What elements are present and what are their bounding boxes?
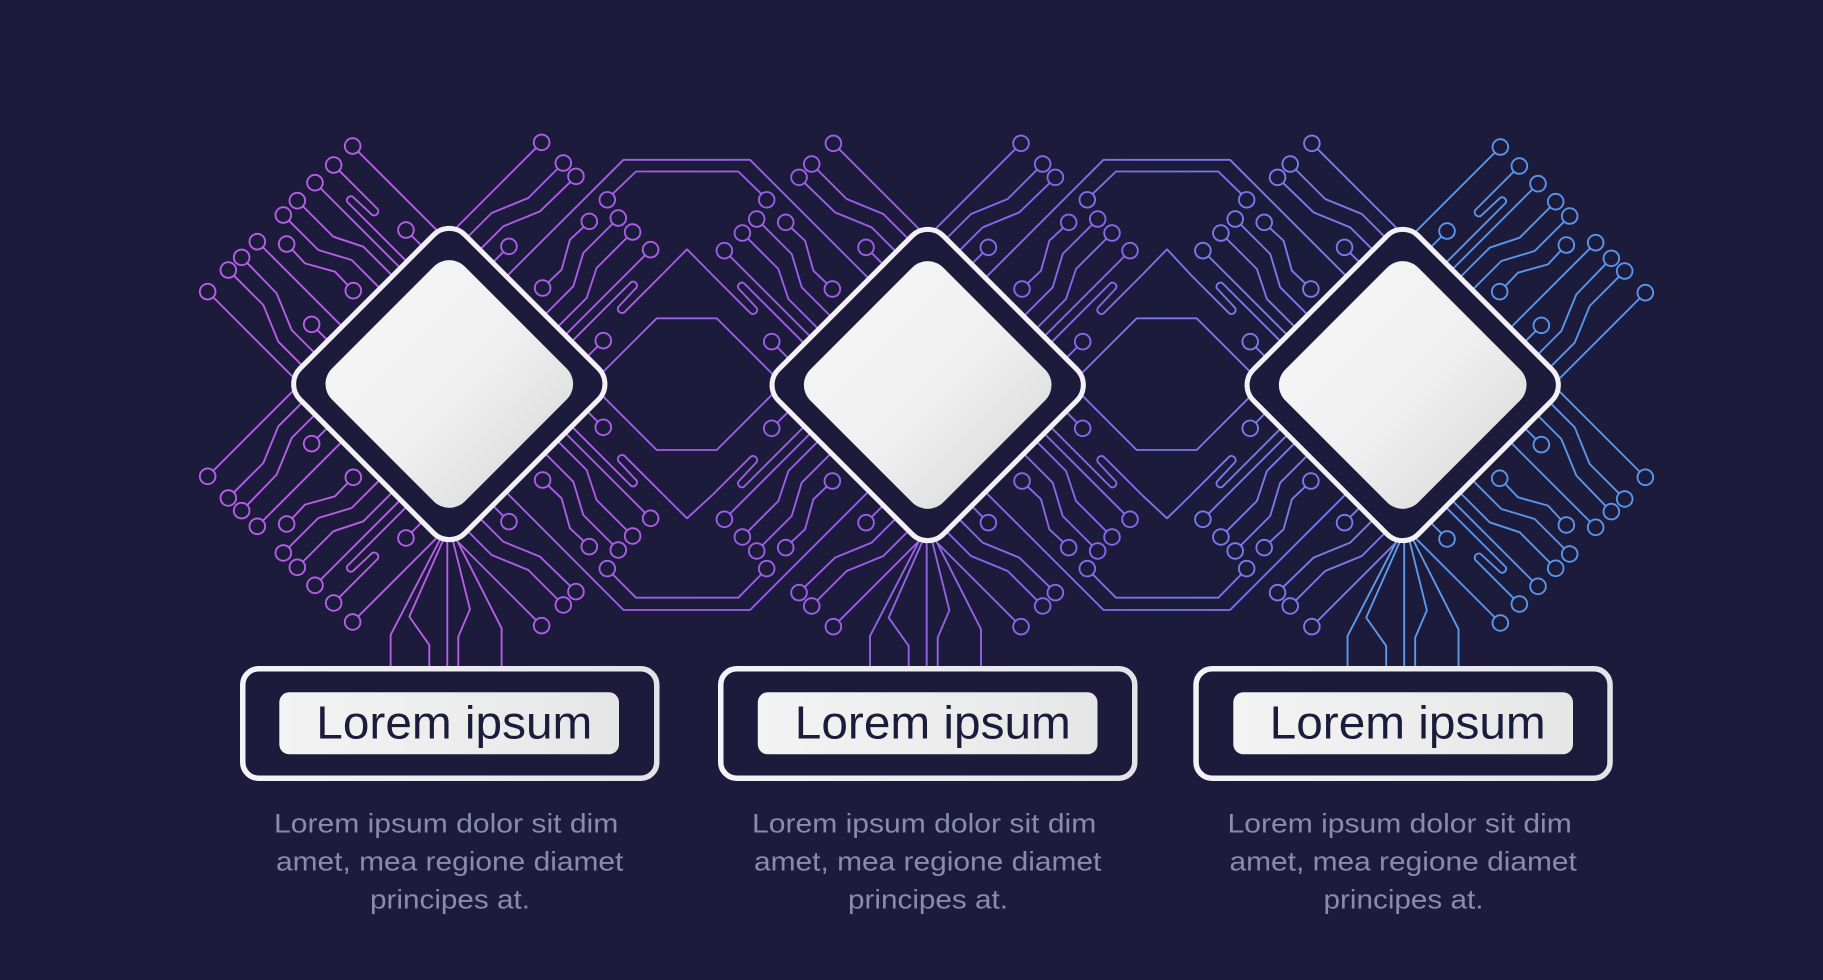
panel: chip 3 xyxy=(1191,136,1653,914)
circuit traces: chip 2 left xyxy=(712,136,922,634)
description 1 xyxy=(274,809,624,914)
description 2: Lorem ipsum dolor sit dim xyxy=(752,809,1096,839)
description 1: amet, mea regione diamet xyxy=(276,847,624,877)
circuit links between chips xyxy=(495,160,1358,610)
panel: chip 2 xyxy=(712,136,1142,914)
description 1: Lorem ipsum dolor sit dim xyxy=(274,809,618,839)
link: chip 2 to chip 3 xyxy=(974,160,1358,610)
description 2: amet, mea regione diamet xyxy=(754,847,1102,877)
description 3: principes at. xyxy=(1324,884,1484,914)
chip icon 2 xyxy=(763,220,1092,550)
circuit traces: chip 3 right xyxy=(1410,139,1653,631)
circuit traces: chip 3 left xyxy=(1191,136,1401,634)
circuit traces: chip 2 right xyxy=(932,136,1142,634)
chip icon 3 xyxy=(1238,220,1567,550)
description 2 xyxy=(752,809,1102,914)
description 3 xyxy=(1228,809,1577,914)
label box 1: Lorem ipsum xyxy=(316,696,592,748)
description 3: Lorem ipsum dolor sit dim xyxy=(1228,809,1572,839)
label box 3 xyxy=(1196,669,1610,778)
description 1: principes at. xyxy=(370,884,530,914)
connector fan: chip 2 xyxy=(870,539,981,668)
label box 2: Lorem ipsum xyxy=(795,696,1071,748)
circuit traces: chip 1 right xyxy=(453,135,663,633)
description 3: amet, mea regione diamet xyxy=(1230,847,1577,877)
label box 1 xyxy=(243,669,657,778)
label box 2 xyxy=(721,669,1135,778)
connector fan: chip 3 xyxy=(1348,539,1459,668)
connector fan: chip 1 xyxy=(391,538,502,667)
description 2: principes at. xyxy=(848,884,1008,914)
label box 3: Lorem ipsum xyxy=(1270,696,1546,748)
chip icon 1 xyxy=(285,219,614,549)
panel: chip 1 xyxy=(200,135,663,914)
link: chip 1 to chip 2 xyxy=(495,160,882,610)
circuit traces: chip 1 left xyxy=(200,138,443,630)
